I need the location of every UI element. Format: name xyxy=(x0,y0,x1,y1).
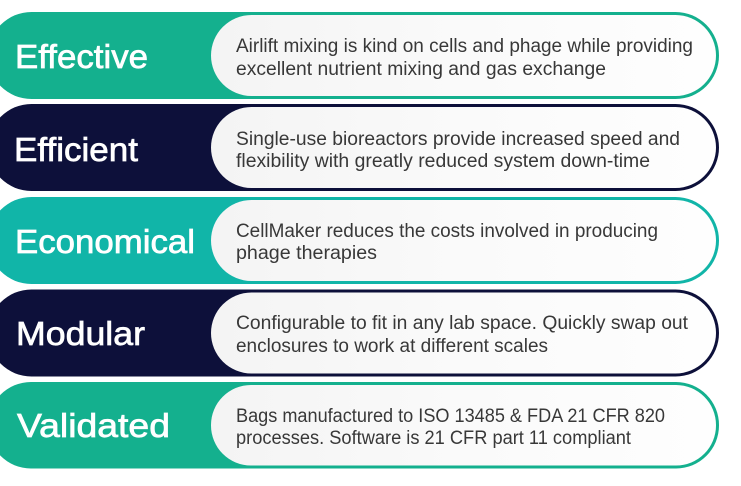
heading: Modular: Modular xyxy=(16,315,145,352)
heading: Effective: Effective xyxy=(15,38,148,75)
panel: Validated xyxy=(0,382,719,468)
heading: Validated: Validated xyxy=(17,407,170,444)
panel: Efficient xyxy=(0,104,719,191)
text: Efficient description xyxy=(236,129,680,172)
heading: Economical: Economical xyxy=(15,223,195,260)
panel: Modular xyxy=(0,290,719,376)
text: Economical description xyxy=(236,221,658,264)
text: Effective description xyxy=(236,36,693,80)
text: Modular description: enclosures to work at different scales xyxy=(236,336,548,357)
text: Effective description: Airlift mixing is kind on cells and phage while providing xyxy=(236,36,693,57)
panel: Economical xyxy=(0,197,719,284)
text: Modular description xyxy=(236,313,689,357)
text: Modular description: Configurable to fit in any lab space. Quickly swap out xyxy=(236,313,689,334)
panel: Effective xyxy=(0,12,719,99)
text: Validated description: Bags manufactured to ISO 13485 & FDA 21 CFR 820 xyxy=(236,406,665,427)
text: Efficient description: Single-use bioreactors provide increased speed and xyxy=(236,129,680,150)
text: Effective description: excellent nutrient mixing and gas exchange xyxy=(236,59,606,80)
text: Validated description xyxy=(236,406,665,449)
heading: Efficient: Efficient xyxy=(14,131,138,168)
text: Economical description: phage therapies xyxy=(236,243,377,264)
text: Economical description: CellMaker reduces the costs involved in producing xyxy=(236,221,658,242)
text: Validated description: processes. Software is 21 CFR part 11 compliant xyxy=(236,428,632,449)
text: Efficient description: flexibility with greatly reduced system down-time xyxy=(236,151,650,172)
